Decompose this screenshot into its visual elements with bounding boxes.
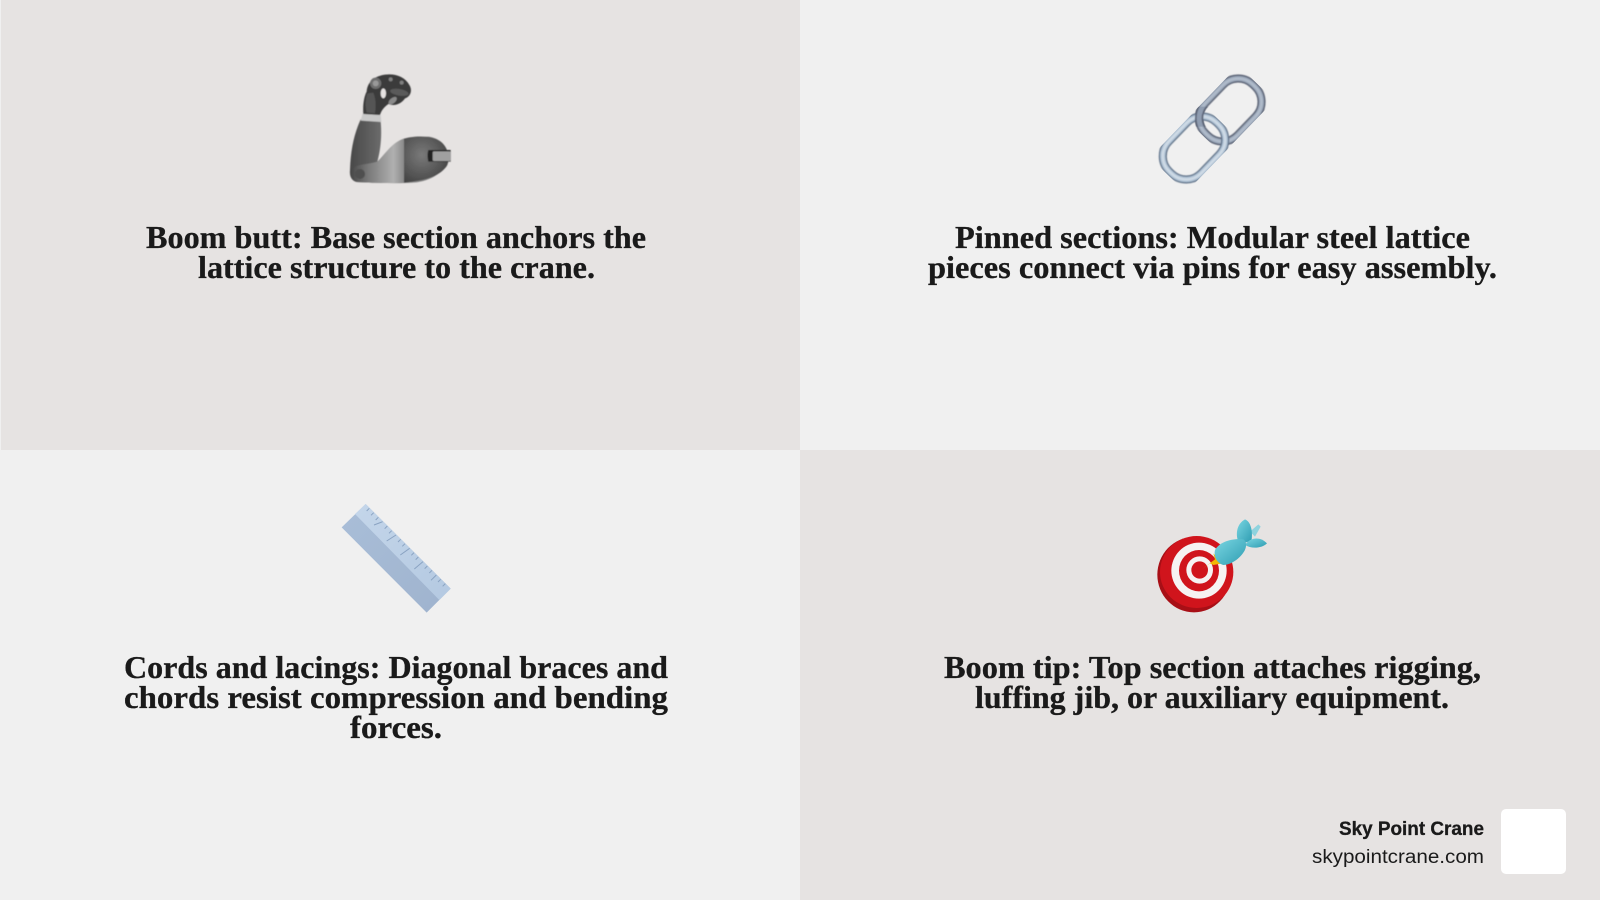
- icon: ruler: [342, 504, 451, 613]
- panel: pinned sections: [928, 74, 1496, 286]
- heading: boom butt: lattice structure to the crane.: [198, 249, 595, 285]
- logo placeholder: [1501, 809, 1566, 874]
- panel: boom tip: [800, 450, 1600, 900]
- icon: dart target: [1157, 519, 1267, 612]
- brand name: Sky Point Crane: [1339, 819, 1484, 840]
- panel: cords and lacings: [0, 450, 800, 900]
- heading: pinned sections: Pinned sections: Modular steel lattice: [955, 219, 1470, 255]
- panel: boom butt: [0, 0, 800, 450]
- brand: Sky Point Crane: [1312, 809, 1566, 874]
- heading: boom tip: luffing jib, or auxiliary equipment.: [975, 679, 1449, 715]
- heading: cords and lacings: forces.: [350, 709, 442, 745]
- heading: cords and lacings: Cords and lacings: Diagonal braces and: [124, 649, 668, 685]
- heading: cords and lacings: chords resist compression and bending: [124, 679, 668, 715]
- heading: boom butt: Boom butt: Base section anchors the: [146, 219, 646, 255]
- icon: mechanical arm: [350, 74, 451, 183]
- icon: chain link: [1158, 74, 1266, 184]
- heading: boom tip: Boom tip: Top section attaches rigging,: [944, 649, 1481, 685]
- brand url: skypointcrane.com: [1312, 847, 1484, 868]
- heading: pinned sections: pieces connect via pins for easy assembly.: [928, 249, 1497, 285]
